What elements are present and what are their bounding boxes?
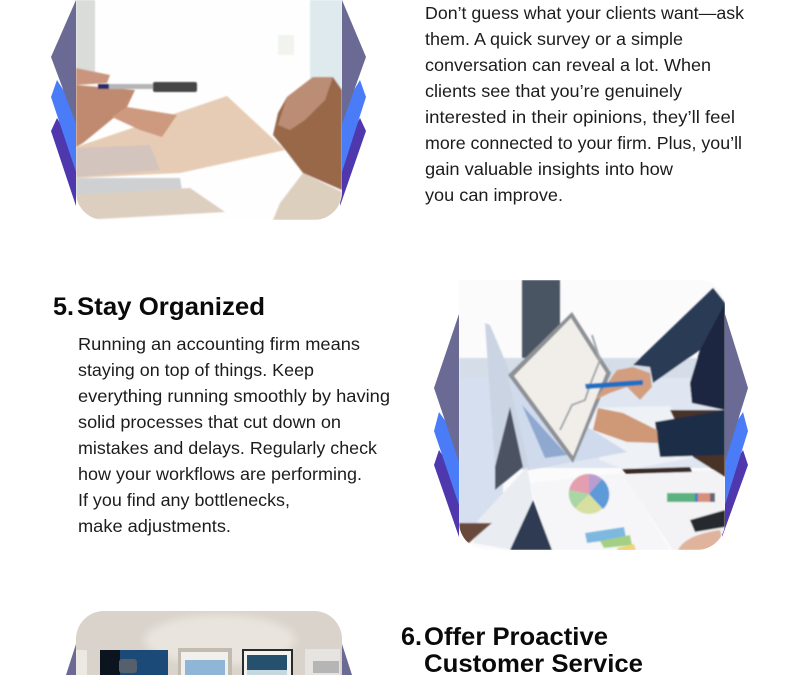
photo: handing over a document — [76, 0, 342, 220]
photo: reviewing charts on a laptop — [459, 280, 725, 551]
text block: step 5 body: make adjustments. — [78, 516, 231, 536]
text block: step 4 body: gain valuable insights into how — [425, 159, 673, 179]
text block: step 4 body: Don’t guess what your clients want—ask — [425, 3, 744, 23]
text block: step 4 body: interested in their opinions, they’ll feel — [425, 107, 735, 127]
heading: step 6: 6. — [401, 623, 422, 651]
text block: step 4 body: more connected to your firm. Plus, you’ll — [425, 133, 742, 153]
text block: step 5 body: Running an accounting firm means — [78, 334, 360, 354]
heading: step 5: 5. — [53, 293, 74, 321]
text block: step 5 body: staying on top of things. Keep — [78, 360, 314, 380]
hexagon accents: left — [434, 314, 459, 537]
hexagon accents: right — [722, 314, 748, 537]
panel: step 5 photo with hexagon accents — [434, 280, 748, 551]
text block: step 4 body: clients see that you’re genuinely — [425, 81, 682, 101]
text block: step 5 body: everything running smoothly by having — [78, 386, 390, 406]
text block: step 5 body: If you find any bottlenecks, — [78, 490, 290, 510]
hexagon accents: right — [340, 0, 366, 206]
text block: step 5 body: solid processes that cut down on — [78, 412, 341, 432]
hexagon accents: left — [66, 644, 76, 675]
panel: step 6 photo with hexagon accents — [66, 611, 352, 675]
text block: step 4 body: them. A quick survey or a simple — [425, 29, 683, 49]
panel: step 4 photo with hexagon accents — [51, 0, 366, 220]
heading: step 5: Stay Organized — [77, 293, 265, 321]
text block: step 4 body — [425, 3, 744, 205]
hexagon accents: left — [51, 0, 76, 206]
heading: step 6: Offer Proactive — [424, 623, 608, 651]
text block: step 5 body — [78, 334, 390, 536]
text block: step 5 body: mistakes and delays. Regularly check — [78, 438, 377, 458]
photo: gallery wall with framed pictures — [76, 611, 342, 675]
heading: step 6 — [401, 623, 643, 675]
hexagon accents: right — [342, 644, 352, 675]
text block: step 4 body: you can improve. — [425, 185, 563, 205]
text block: step 5 body: how your workflows are performing. — [78, 464, 362, 484]
text block: step 4 body: conversation can reveal a lot. When — [425, 55, 711, 75]
